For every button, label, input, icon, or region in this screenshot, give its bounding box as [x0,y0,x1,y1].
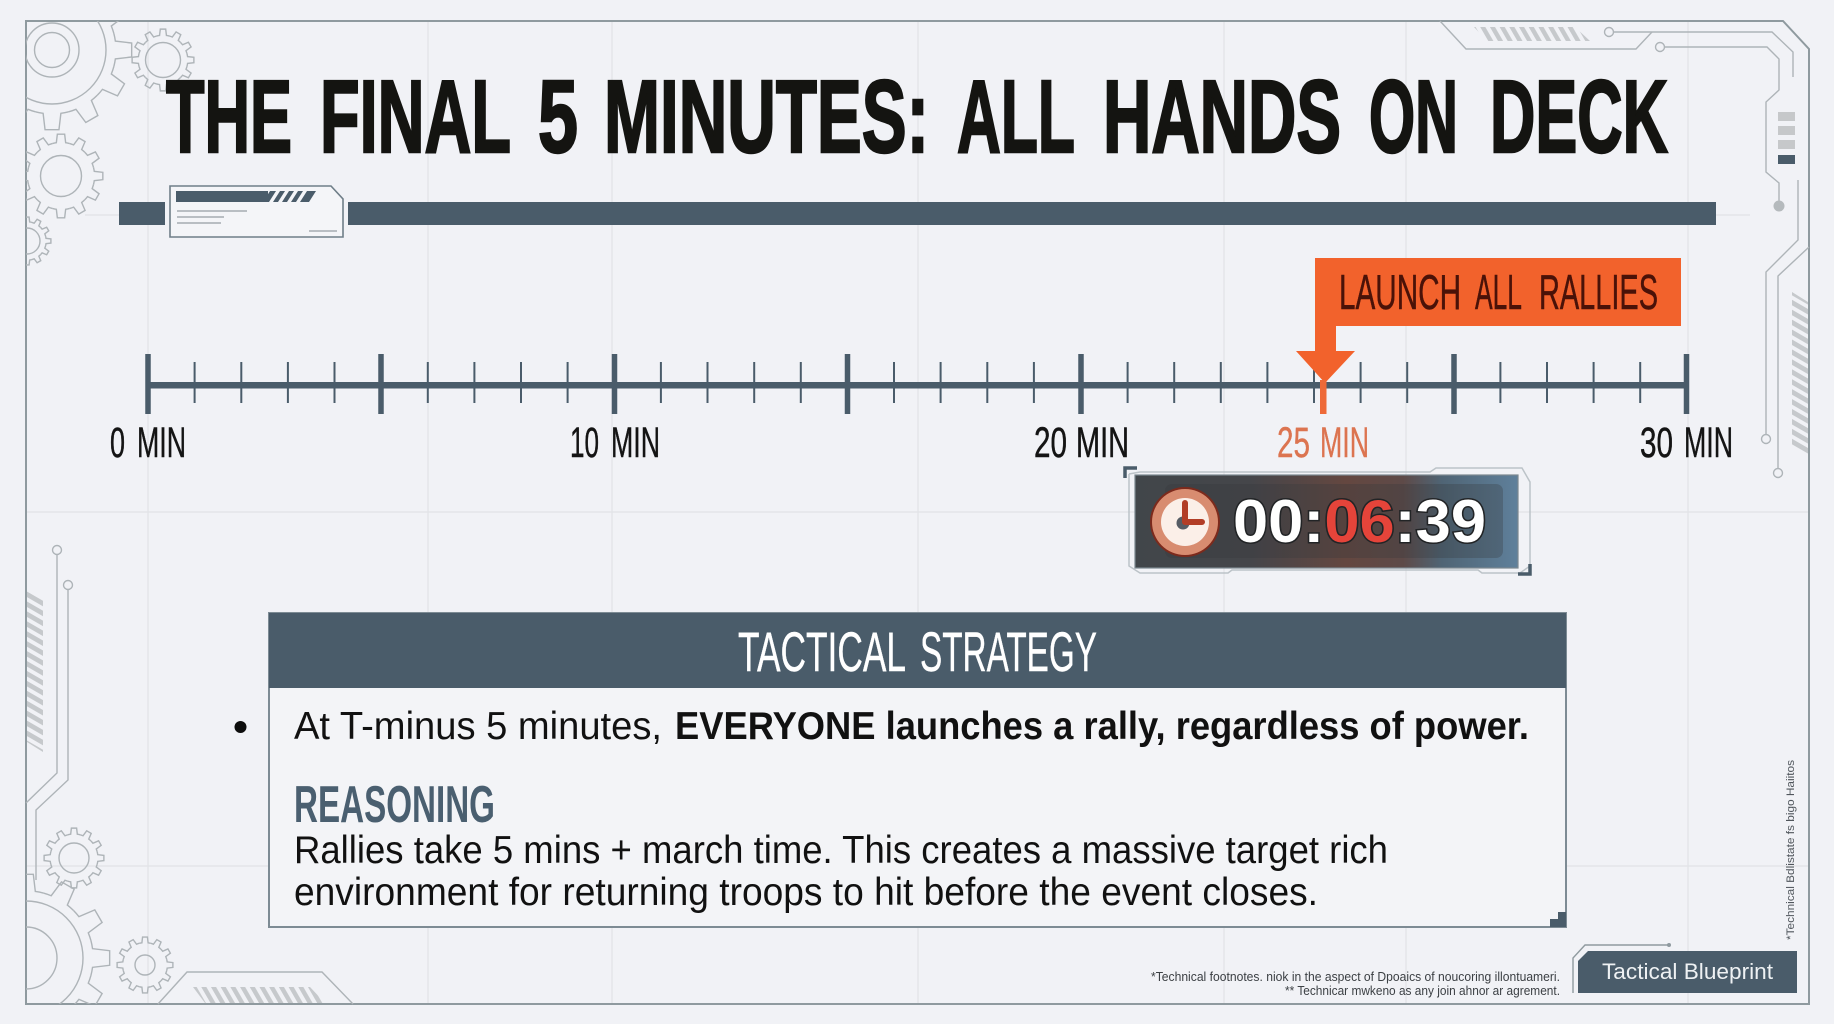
reasoning text: Rallies take 5 mins + march time. This creates a massive target rich [294,829,1388,872]
strategy statement: EVERYONE launches a rally, regardless of power. [675,705,1529,748]
bullet [234,721,246,733]
label: 20 min: MIN [1076,419,1129,467]
panel body [269,613,1566,927]
timer digits: 00:06:39 [1233,488,1486,555]
right circuit traces [1762,180,1809,478]
label: 0 min: MIN [137,419,186,467]
title: 5 [538,59,578,174]
panel heading: STRATEGY [920,620,1097,683]
callout label: ALL [1475,266,1522,320]
icon: clock [1150,487,1220,557]
vertical side note: *Technical Bdlistate fs bigo Haiitos [1785,759,1797,940]
callout label: RALLIES [1539,266,1658,320]
label: 30 min [1640,419,1733,467]
callout label [1339,266,1658,320]
header plate [170,186,343,237]
title: FINAL [320,59,511,174]
label: 20 min: 20 [1034,419,1067,467]
label: 30 min: 30 [1640,419,1673,467]
title: DECK [1490,59,1668,174]
timeline [110,354,1733,467]
label: 25 min: 25 [1277,419,1310,467]
title: ALL [957,59,1075,174]
top-right notch and circuit traces [1440,21,1795,212]
reasoning text [294,829,1388,914]
strategy statement [294,705,1529,748]
callout: launch all rallies [1296,258,1681,414]
label: 20 min [1034,419,1129,467]
title [166,59,1668,174]
footnotes: *Technical footnotes. niok in the aspect of Dpoaics of noucoring illontuameri. [1151,970,1560,984]
label: 25 min: MIN [1320,419,1369,467]
corner marker [1550,912,1566,927]
timeline axis [148,382,1687,388]
label: 25 min [1277,419,1369,467]
label: 10 min [570,419,660,467]
top-left gear cluster [26,21,195,266]
title: THE [166,59,292,174]
reasoning text: environment for returning troops to hit before the event closes. [294,871,1318,914]
panel header [269,613,1566,688]
bottom-left gear cluster [26,827,174,1004]
title: ON [1369,59,1458,174]
label: 10 min: MIN [611,419,660,467]
major ticks [148,354,1686,414]
footnotes: ** Technicar mwkeno as any join ahnor ar agrement. [1285,984,1560,998]
label: 0 min: 0 [110,419,125,467]
header bar [119,202,1716,225]
badge: tactical blueprint: Tactical Blueprint [1602,959,1773,984]
callout arrow and flag [1296,258,1681,383]
minor ticks [195,362,1640,403]
panel: tactical strategy [234,613,1566,927]
label: 10 min: 10 [570,419,599,467]
bottom-left trapezoid tab [158,972,353,1004]
badge: tactical blueprint [1573,943,1797,993]
left circuit traces [26,546,72,880]
timer frame brackets [1129,468,1530,573]
countdown timer [1125,468,1530,574]
reasoning heading: REASONING [294,776,495,834]
panel heading: TACTICAL [738,620,906,683]
callout label: LAUNCH [1339,266,1461,320]
timer panel [1135,475,1518,568]
title: MINUTES: [604,59,929,174]
title: HANDS [1103,59,1341,174]
strategy statement: At T-minus 5 minutes, [294,705,662,748]
footnotes [1151,970,1560,998]
label: 30 min: MIN [1684,419,1733,467]
label: 0 min [110,419,186,467]
